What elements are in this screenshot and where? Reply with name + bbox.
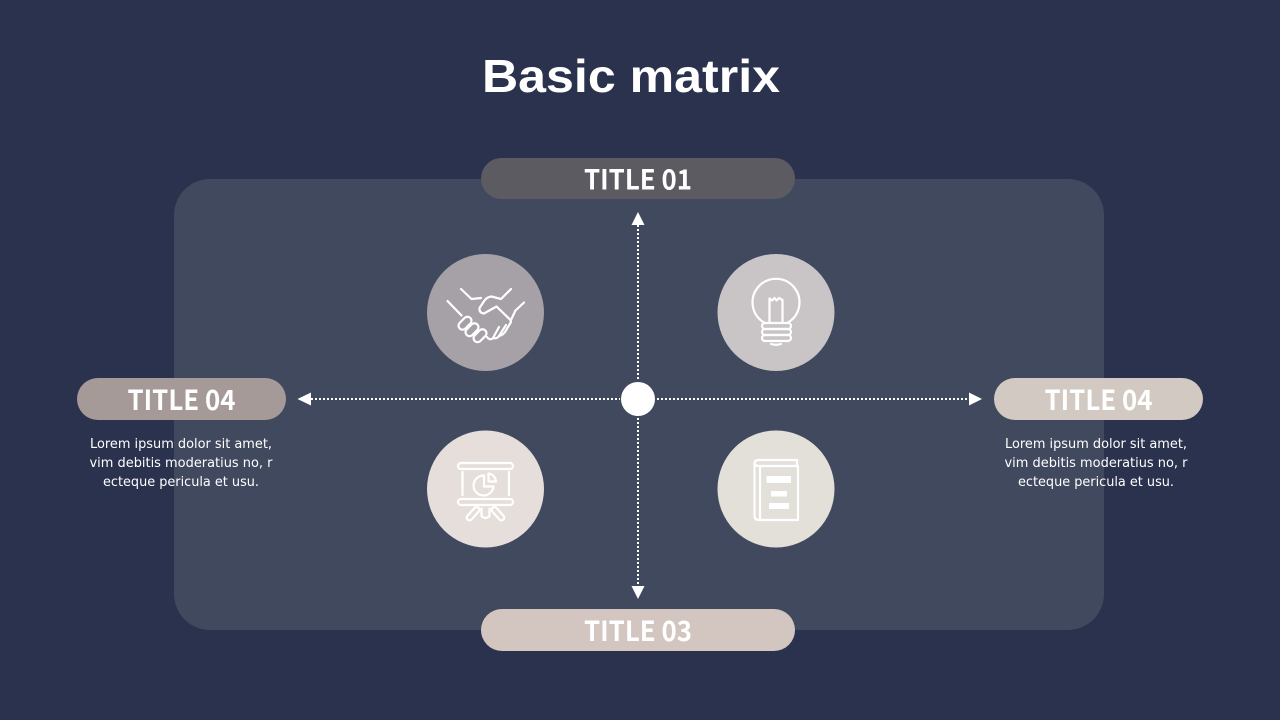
icon: light bulb [718,254,834,371]
pill: bottom title 03: TITLE 03 [584,610,692,650]
center dot [621,382,655,416]
text block: right description: vim debitis moderatius no, r [1004,456,1188,471]
pill: right title 04 [994,378,1203,420]
panel: matrix background [174,179,1104,630]
text block: right description: ecteque pericula et usu. [1018,475,1174,490]
vertical axis arrow down [632,418,644,599]
pill: left title 04: TITLE 04 [128,379,236,419]
pill: bottom title 03 [481,609,795,651]
title: Basic matrix [482,50,780,102]
pill: right title 04: TITLE 04 [1044,379,1152,419]
icon: handshake [427,254,544,371]
vertical axis arrow up [632,212,644,381]
horizontal axis arrow right [657,392,982,406]
text block: left description [90,437,273,490]
text block: left description: ecteque pericula et usu. [103,475,259,490]
icon: book [718,430,834,548]
text block: left description: vim debitis moderatius no, r [90,456,273,471]
icon: presentation board [427,430,544,548]
horizontal axis arrow left [298,392,620,406]
pill: top title 01 [481,158,795,199]
text block: right description: Lorem ipsum dolor sit amet, [1005,437,1187,452]
text block: right description [1004,437,1188,490]
pill: left title 04 [77,378,286,420]
pill: top title 01: TITLE 01 [584,158,692,198]
text block: left description: Lorem ipsum dolor sit amet, [90,437,272,452]
